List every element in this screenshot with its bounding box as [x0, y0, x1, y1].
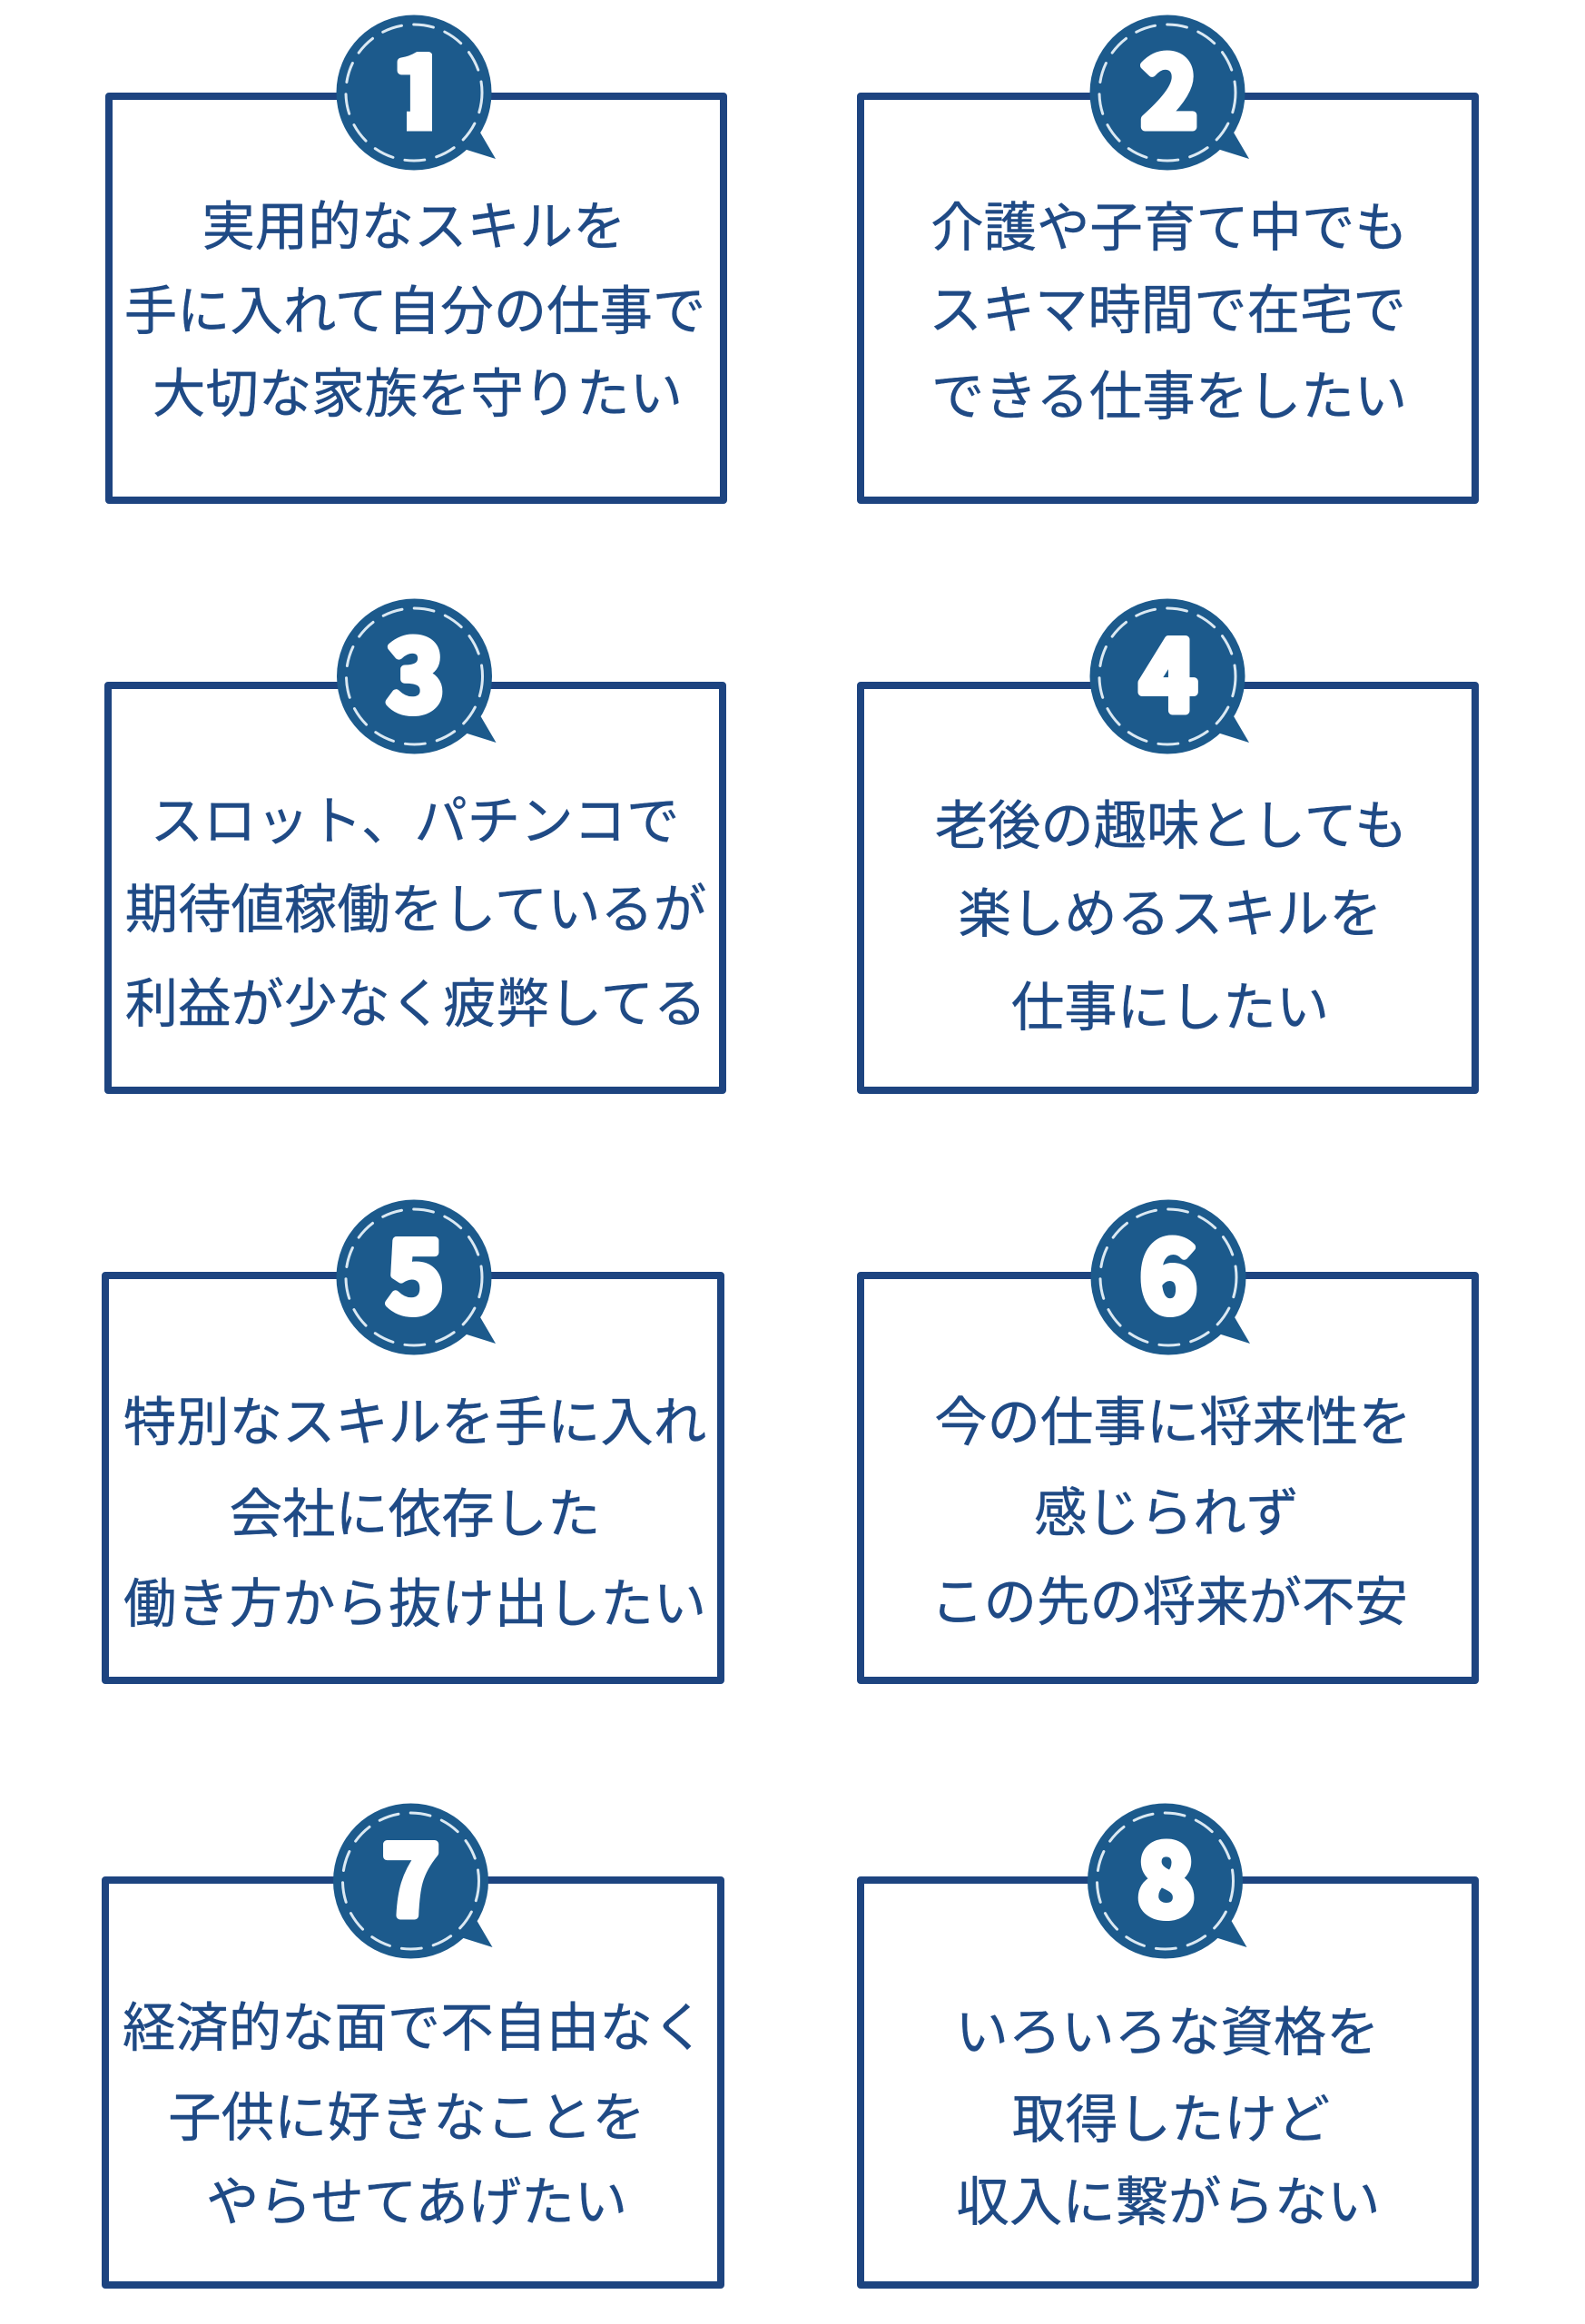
badge 5 — [336, 1200, 496, 1354]
text 2: スキマ時間で在宅で — [929, 281, 1406, 340]
panel 5 — [105, 1200, 721, 1680]
text 5: 特別なスキルを手に入れ — [123, 1393, 706, 1452]
panel 8 — [861, 1803, 1475, 2285]
text 4: 楽しめるスキルを — [958, 885, 1383, 944]
text 4: 老後の趣味としても — [935, 797, 1407, 856]
frame 2 — [861, 96, 1475, 500]
frame 3 — [108, 685, 723, 1090]
badge 2 — [1089, 15, 1249, 171]
frame 4 — [861, 685, 1475, 1090]
text 8: いろいろな資格を — [955, 2004, 1380, 2063]
text 8 — [955, 2004, 1381, 2232]
text 6: この先の将来が不安 — [930, 1573, 1408, 1632]
text 1: 大切な家族を守りたい — [153, 365, 683, 424]
text 4 — [935, 797, 1407, 1038]
badge 8 — [1088, 1803, 1247, 1959]
badge 6: 6 — [1140, 1200, 1196, 1340]
frame 6 — [861, 1275, 1475, 1680]
badge 4: 4 — [1140, 599, 1196, 739]
text 7: 経済的な面で不自由なく — [123, 1999, 705, 2058]
badge 3 — [337, 599, 496, 753]
badge 8: 8 — [1137, 1804, 1195, 1944]
badge 1: 1 — [391, 15, 448, 155]
text 2: できる仕事をしたい — [931, 368, 1407, 427]
text 3: 利益が少なく疲弊してる — [125, 975, 706, 1034]
badge 6 — [1091, 1200, 1250, 1354]
frame 8 — [861, 1880, 1475, 2285]
text 7: 子供に好きなことを — [168, 2089, 645, 2148]
panel 2 — [861, 15, 1475, 500]
text 7 — [123, 1999, 705, 2232]
text 6 — [930, 1393, 1412, 1632]
text 4: 仕事にしたい — [1011, 979, 1329, 1038]
badge 5: 5 — [387, 1200, 443, 1340]
text 3: スロット、パチンコで — [151, 793, 679, 852]
text 6: 今の仕事に将来性を — [934, 1393, 1412, 1452]
panel 6 — [861, 1200, 1475, 1680]
text 1: 手に入れて自分の仕事で — [124, 282, 705, 341]
text 2: 介護や子育て中でも — [930, 199, 1408, 258]
badge 2: 2 — [1141, 15, 1197, 155]
text 6: 感じられず — [1034, 1484, 1299, 1543]
frame 7 — [105, 1880, 721, 2285]
badge 7 — [333, 1803, 492, 1959]
text 1: 実用的なスキルを — [202, 198, 626, 257]
text 2 — [929, 199, 1408, 427]
badge 4 — [1089, 599, 1249, 753]
text 5 — [123, 1393, 706, 1634]
text 5: 働き方から抜け出したい — [123, 1575, 706, 1634]
text 7: やらせてあげたい — [206, 2173, 627, 2232]
text 1 — [124, 198, 705, 424]
badge 7: 7 — [382, 1804, 439, 1944]
text 3: 期待値稼働をしているが — [125, 881, 706, 940]
badge 3: 3 — [387, 599, 444, 739]
badge 1 — [336, 15, 496, 171]
text 5: 会社に依存した — [230, 1485, 600, 1544]
text 8: 収入に繋がらない — [956, 2173, 1381, 2232]
panel 3 — [108, 599, 723, 1090]
panel 7 — [105, 1803, 721, 2285]
text 8: 取得したけど — [1012, 2091, 1330, 2150]
frame 1 — [109, 96, 724, 500]
panel 1 — [109, 15, 724, 500]
text 3 — [125, 793, 706, 1034]
frame 5 — [105, 1275, 721, 1680]
panel 4 — [861, 599, 1475, 1090]
